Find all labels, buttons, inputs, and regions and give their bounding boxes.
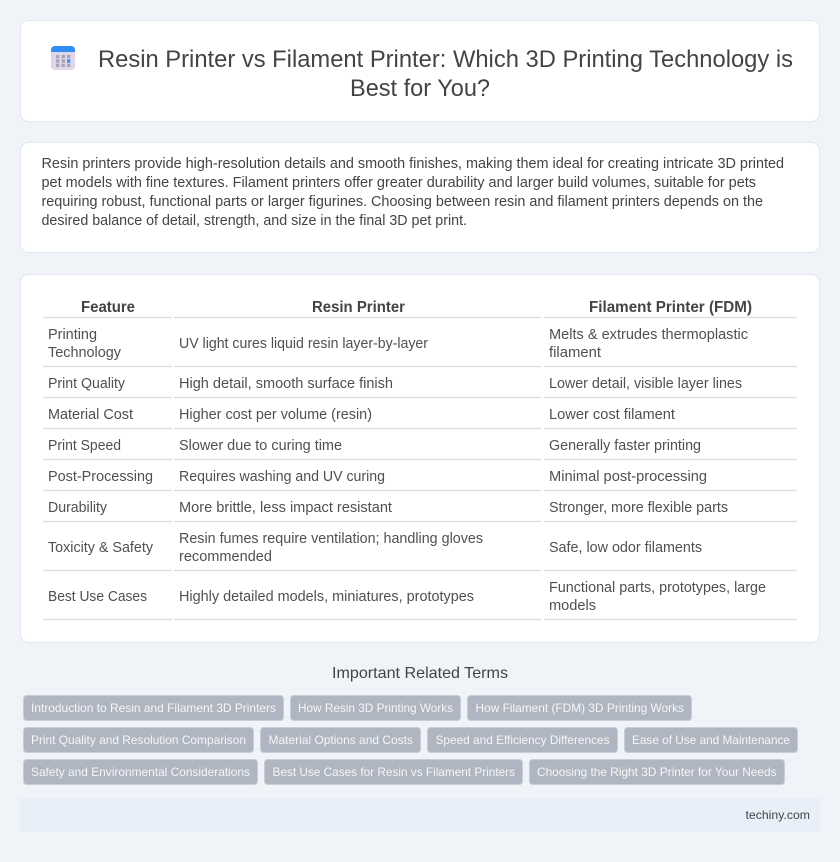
table header xyxy=(43,299,797,318)
row: material cost: Lower cost filament xyxy=(549,407,675,423)
footer xyxy=(20,798,820,832)
table header: Resin Printer xyxy=(312,299,405,316)
tag list xyxy=(24,696,798,784)
tag: Introduction to Resin and Filament 3D Printers xyxy=(31,701,276,715)
tag xyxy=(290,696,460,720)
row: material cost: Higher cost per volume (resin) xyxy=(179,407,372,423)
tag: Safety and Environmental Considerations xyxy=(31,765,250,779)
row: print speed: Print Speed xyxy=(48,438,121,454)
tag xyxy=(530,760,784,784)
row: printing technology xyxy=(43,327,797,366)
tag xyxy=(24,728,254,752)
row: post-processing: Requires washing and UV curing xyxy=(179,469,385,485)
row: toxicity and safety xyxy=(43,531,797,570)
row: toxicity and safety: Safe, low odor filaments xyxy=(549,540,702,556)
intro text: desired balance of detail, strength, and size in the final 3D pet print. xyxy=(42,213,467,229)
table header: Filament Printer (FDM) xyxy=(589,299,752,316)
row: best use cases: Highly detailed models, miniatures, prototypes xyxy=(179,589,474,605)
tag xyxy=(24,696,284,720)
row: best use cases: Functional parts, prototypes, large xyxy=(549,580,766,596)
row: post-processing xyxy=(43,469,797,490)
tag xyxy=(428,728,618,752)
row: print quality: Print Quality xyxy=(48,376,126,392)
intro text: Resin printers provide high-resolution details and smooth finishes, making them ideal for creating intricate 3D printed xyxy=(42,156,784,172)
row: printing technology: filament xyxy=(549,345,601,361)
row: best use cases: models xyxy=(549,598,596,614)
tag: Choosing the Right 3D Printer for Your Needs xyxy=(537,765,776,779)
icon: calendar xyxy=(51,46,75,70)
row: print speed xyxy=(43,438,797,460)
row: best use cases xyxy=(43,580,797,620)
tag: Print Quality and Resolution Comparison xyxy=(31,733,246,747)
tag xyxy=(24,760,258,784)
tag xyxy=(468,696,692,720)
row: print speed: Generally faster printing xyxy=(549,438,701,454)
table header: Feature xyxy=(81,299,135,316)
row: printing technology: Melts & extrudes thermoplastic xyxy=(549,327,748,343)
row: toxicity and safety: Toxicity & Safety xyxy=(48,540,154,556)
panel: comparison table xyxy=(20,274,820,642)
heading: important related terms: Important Related Terms xyxy=(332,665,508,682)
row: durability: Stronger, more flexible parts xyxy=(549,500,728,516)
row: print quality: High detail, smooth surface finish xyxy=(179,376,393,392)
tag xyxy=(624,728,798,752)
row: durability: Durability xyxy=(48,500,108,516)
row: material cost xyxy=(43,407,797,428)
tag: How Resin 3D Printing Works xyxy=(298,701,453,715)
row: best use cases: Best Use Cases xyxy=(48,589,147,605)
row: print quality: Lower detail, visible layer lines xyxy=(549,376,742,392)
tag: Best Use Cases for Resin vs Filament Printers xyxy=(272,765,515,779)
row: printing technology: Printing xyxy=(48,327,97,343)
tag: How Filament (FDM) 3D Printing Works xyxy=(476,701,684,715)
row: material cost: Material Cost xyxy=(48,407,133,423)
row: printing technology: UV light cures liquid resin layer-by-layer xyxy=(179,336,428,352)
intro text: pet models with fine textures. Filament printers offer greater durability and larger build volumes, suitable for pets xyxy=(42,175,756,191)
row: post-processing: Post-Processing xyxy=(48,469,153,485)
title: Best for You? xyxy=(350,75,490,102)
tag xyxy=(264,760,522,784)
row: toxicity and safety: recommended xyxy=(179,549,272,565)
row: printing technology: Technology xyxy=(48,345,122,361)
row: print quality xyxy=(43,376,797,398)
title: Resin Printer vs Filament Printer: Which 3D Printing Technology is xyxy=(98,46,793,73)
intro text: requiring robust, functional parts or larger figurines. Choosing between resin and filament printers depends on the xyxy=(42,194,763,210)
row: durability xyxy=(43,500,797,522)
tag: Speed and Efficiency Differences xyxy=(436,733,610,747)
row: toxicity and safety: Resin fumes require ventilation; handling gloves xyxy=(179,531,483,547)
tag: Ease of Use and Maintenance xyxy=(632,733,790,747)
footer brand: techiny.com xyxy=(746,808,810,822)
panel: header xyxy=(20,20,820,122)
row: post-processing: Minimal post-processing xyxy=(549,469,707,485)
tag: Material Options and Costs xyxy=(268,733,413,747)
row: durability: More brittle, less impact resistant xyxy=(179,500,392,516)
panel: introduction xyxy=(20,142,820,252)
row: print speed: Slower due to curing time xyxy=(179,438,342,454)
tag xyxy=(260,728,420,752)
